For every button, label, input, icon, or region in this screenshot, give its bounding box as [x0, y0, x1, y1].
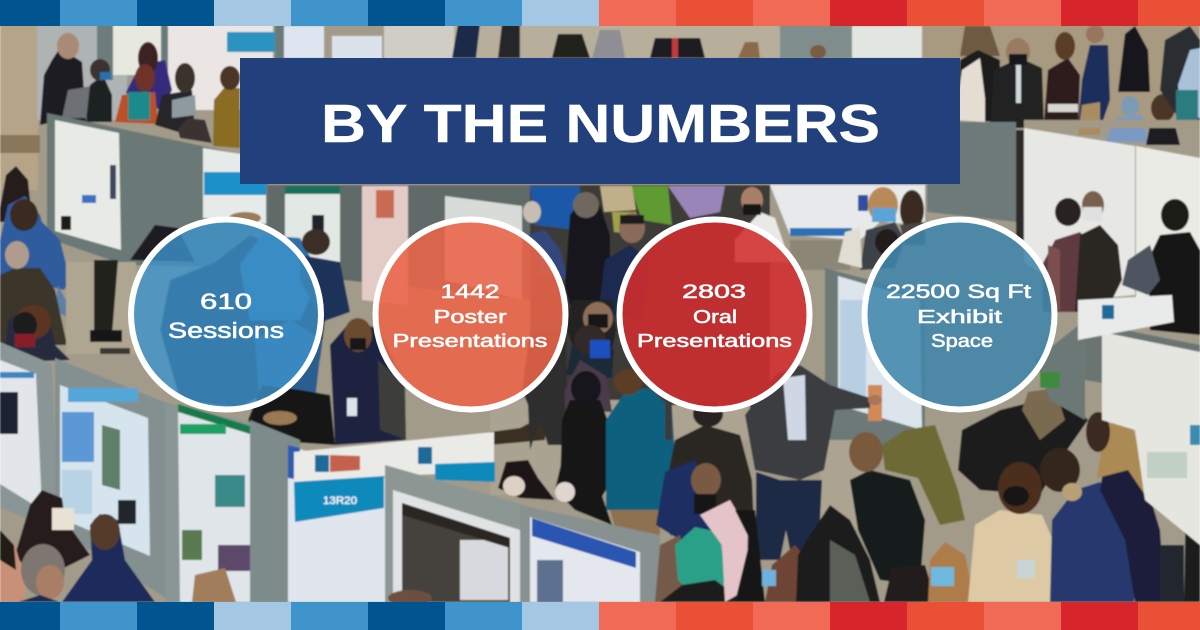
stat circle: poster presentations	[376, 220, 566, 410]
lower left panels	[0, 342, 58, 530]
stat circle: oral presentations: Oral	[693, 307, 737, 327]
stat circle: exhibit space	[864, 220, 1054, 410]
bottom colour strip	[0, 602, 1200, 630]
seated / standing heads	[498, 460, 555, 500]
stat circle: poster presentations: Presentations	[392, 331, 548, 351]
floor centre	[490, 400, 640, 495]
top crowd centre	[452, 24, 480, 58]
man in suit	[745, 365, 870, 480]
sign label: 13R20	[323, 495, 357, 507]
big right posters	[1024, 128, 1135, 300]
top crowd left	[40, 48, 86, 125]
stat circle: poster presentations: Poster	[434, 307, 506, 327]
stat circle: sessions: 610	[200, 289, 252, 314]
lower left people	[15, 490, 90, 585]
stat circle: exhibit space: Space	[931, 331, 993, 351]
title banner	[240, 58, 960, 184]
left crowd	[0, 166, 40, 222]
back wall	[0, 20, 38, 190]
grey divider panel top right	[927, 122, 1016, 222]
right lower poster panel	[1085, 322, 1200, 400]
floor left	[66, 262, 136, 354]
central figures	[522, 330, 568, 450]
stat circle: exhibit space: Exhibit	[917, 307, 1002, 327]
stat circle: exhibit space: 22500 Sq Ft	[886, 282, 1032, 303]
panel under poster wall right	[825, 268, 925, 455]
right people	[1042, 232, 1108, 312]
top crowd right	[960, 26, 1000, 56]
lower right people	[655, 535, 690, 602]
stat circle: oral presentations: 2803	[682, 282, 746, 303]
left panel with posters	[47, 113, 268, 268]
stat circle: sessions	[131, 220, 321, 410]
AMS sign boards	[294, 432, 494, 482]
stat circle: oral presentations	[620, 220, 810, 410]
person with lanyard	[330, 322, 405, 445]
top colour strip	[0, 0, 1200, 26]
people behind first circle	[130, 225, 195, 262]
stat circle: sessions: Sessions	[168, 318, 284, 343]
stat circle: poster presentations: 1442	[440, 282, 500, 303]
person back with navy backpack	[665, 425, 755, 550]
stat circle: oral presentations: Presentations	[637, 331, 792, 351]
mid panels	[268, 185, 532, 300]
centre crowd	[530, 185, 770, 420]
title banner: BY THE NUMBERS	[321, 94, 880, 154]
